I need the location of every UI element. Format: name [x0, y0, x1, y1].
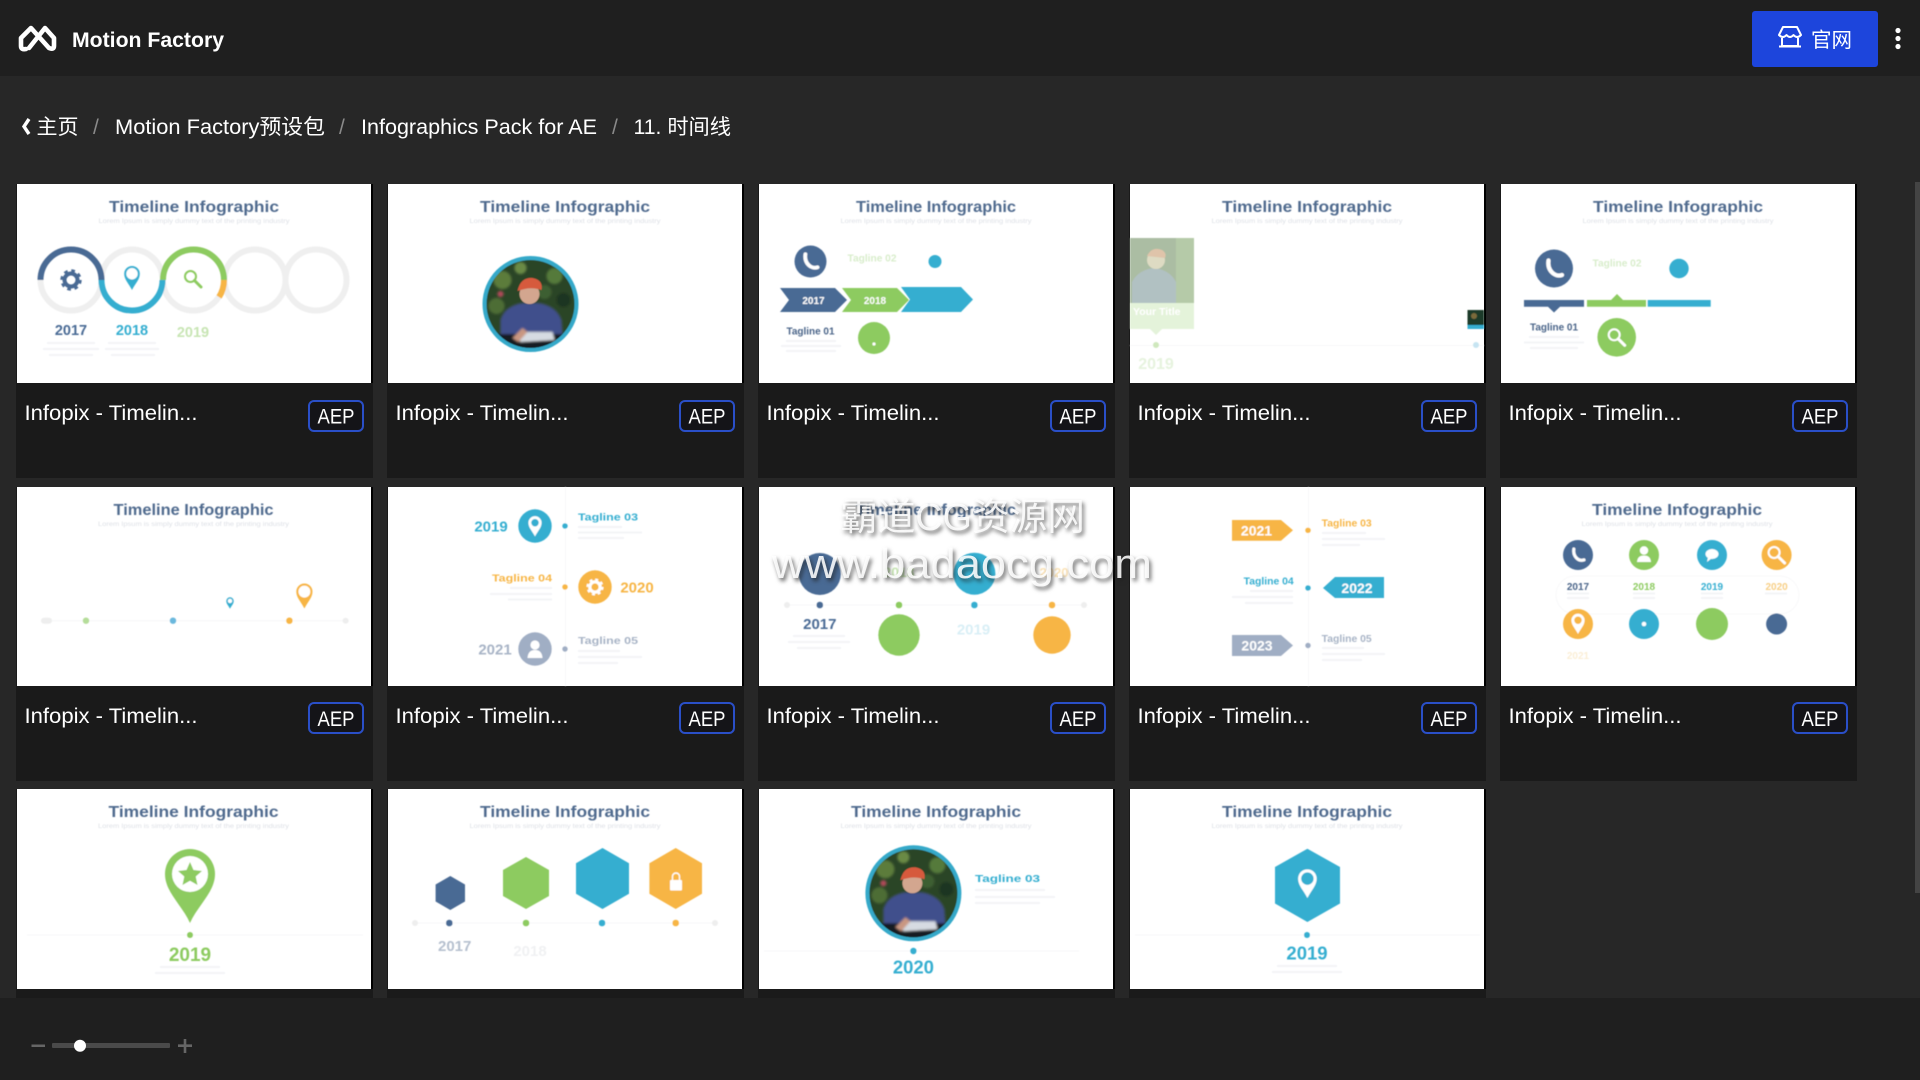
- thumbnail: pin line timeline: [41, 502, 349, 624]
- thumbnail: alternating circles timeline: 2020: [1040, 565, 1068, 580]
- thumbnail: alternating circles timeline: Timeline Infographic: [856, 502, 1016, 519]
- title: Infopix - Timelin...: [1508, 402, 1682, 425]
- thumbnail: chevron timeline: 2018: [864, 296, 887, 307]
- icon: store: [1779, 27, 1801, 46]
- thumbnail: big green pin: Timeline Infographic: [108, 804, 279, 821]
- card 14: [1129, 789, 1486, 998]
- footer bar: [0, 998, 1920, 1080]
- thumbnail: chevron timeline: [780, 199, 1032, 354]
- breadcrumb: Motion Factory预设包: [115, 116, 325, 139]
- thumbnail: vertical timeline circles: 2019: [474, 518, 508, 536]
- back chevron: [24, 119, 29, 134]
- thumbnail: icon grid timeline: Timeline Infographic: [1592, 502, 1762, 519]
- zoom in: [178, 1039, 192, 1053]
- card 2: [387, 184, 744, 478]
- badge: AEP: [1430, 406, 1468, 428]
- watermark: 霸道CG资源网: [840, 497, 1085, 539]
- thumbnail: bar timeline: Lorem Ipsum is simply dummy text of the printing industry: [1582, 218, 1774, 225]
- thumbnail: hexagon pin: Lorem Ipsum is simply dummy text of the printing industry: [1212, 823, 1403, 830]
- breadcrumb: /: [93, 116, 99, 139]
- thumbnail: icon grid timeline: 2019: [1701, 582, 1724, 593]
- thumbnail: portrait with tagline: [764, 804, 1079, 978]
- badge: [1051, 401, 1105, 431]
- card 6: [16, 487, 373, 781]
- thumbnail: hexagon timeline: [412, 804, 718, 960]
- thumbnail: hexagon timeline: Lorem Ipsum is simply dummy text of the printing industry: [470, 823, 661, 830]
- button label: 官网: [1811, 29, 1852, 52]
- badge: AEP: [688, 406, 726, 428]
- thumbnail: ring timeline: 2017: [55, 323, 87, 339]
- thumbnail: alternating circles timeline: 2018: [883, 564, 915, 580]
- breadcrumb: /: [612, 116, 618, 139]
- official site button: [1752, 11, 1878, 67]
- thumbnail: hexagon pin: 2019: [1286, 942, 1328, 964]
- title: Infopix - Timelin...: [1138, 705, 1310, 728]
- card 8: [758, 487, 1115, 781]
- thumbnail: icon grid timeline: 2018: [1633, 582, 1656, 593]
- thumbnail: arrow tag timeline: Tagline 03: [1322, 518, 1372, 530]
- thumbnail: chevron timeline: Tagline 01: [786, 326, 835, 338]
- thumbnail: alternating circles timeline: 2017: [803, 616, 836, 633]
- scrollbar: [1915, 182, 1920, 893]
- badge: [309, 703, 363, 733]
- watermark: [771, 497, 1152, 587]
- thumbnail: arrow tag timeline: 2023: [1241, 638, 1273, 654]
- card 5: [1500, 184, 1857, 478]
- thumbnail: arrow tag timeline: 2022: [1341, 580, 1373, 596]
- badge: AEP: [1802, 708, 1838, 731]
- thumbnail: portrait with tagline: Tagline 03: [975, 874, 1041, 885]
- card 9: [1129, 487, 1486, 781]
- thumbnail: photo card slide-in: Timeline Infographic: [1222, 199, 1392, 216]
- thumbnail: alternating circles timeline: [784, 502, 1087, 656]
- badge: AEP: [1060, 708, 1096, 731]
- title: Infopix - Timelin...: [1508, 705, 1682, 728]
- thumbnail: bar timeline: Timeline Infographic: [1593, 199, 1763, 216]
- thumbnail: hexagon pin: [1135, 804, 1480, 972]
- breadcrumb: Infographics Pack for AE: [361, 116, 597, 139]
- thumbnail: big green pin: Lorem Ipsum is simply dummy text of the printing industry: [98, 823, 290, 830]
- thumbnail: portrait circle: Lorem Ipsum is simply dummy text of the printing industry: [470, 218, 661, 225]
- badge: AEP: [1802, 406, 1838, 428]
- thumbnail: bar timeline: Tagline 01: [1530, 322, 1578, 334]
- thumbnail: alternating circles timeline: 2019: [957, 622, 990, 638]
- card 11: [16, 789, 373, 998]
- header bar: [0, 0, 1920, 76]
- thumbnail: photo card slide-in: Your Title: [1133, 306, 1181, 318]
- thumbnail: pin line timeline: Timeline Infographic: [114, 502, 274, 519]
- thumbnail: portrait circle: Timeline Infographic: [480, 199, 650, 216]
- thumbnail: portrait circle: [470, 199, 661, 352]
- thumbnail: photo card slide-in: [1130, 199, 1484, 373]
- thumbnail: vertical timeline circles: Tagline 05: [578, 636, 639, 647]
- title: Infopix - Timelin...: [24, 705, 198, 728]
- thumbnail: icon grid timeline: 2021: [1567, 651, 1590, 662]
- thumbnail: icon grid timeline: [1556, 502, 1799, 662]
- zoom out: [32, 1044, 45, 1047]
- card 13: [758, 789, 1115, 998]
- thumbnail: hexagon pin: Timeline Infographic: [1222, 804, 1392, 821]
- thumbnail: ring timeline: 2019: [177, 325, 209, 341]
- thumbnail: ring timeline: [40, 199, 346, 355]
- thumbnail: arrow tag timeline: [1232, 487, 1385, 686]
- card 12: [387, 789, 744, 998]
- thumbnail: vertical timeline circles: 2020: [620, 580, 654, 596]
- title: Infopix - Timelin...: [396, 705, 568, 728]
- thumbnail: arrow tag timeline: Tagline 04: [1244, 576, 1294, 588]
- thumbnail: bar timeline: Tagline 02: [1592, 258, 1642, 270]
- card 4: [1129, 184, 1486, 478]
- badge: AEP: [318, 708, 354, 731]
- badge: AEP: [688, 708, 726, 731]
- thumbnail: portrait with tagline: Lorem Ipsum is simply dummy text of the printing industry: [840, 823, 1032, 830]
- thumbnail: icon grid timeline: 2017: [1567, 582, 1590, 593]
- title: Infopix - Timelin...: [766, 402, 940, 425]
- badge: AEP: [1060, 406, 1096, 428]
- breadcrumb: 主页: [36, 116, 78, 139]
- thumbnail: arrow tag timeline: 2021: [1241, 522, 1272, 538]
- thumbnail: bar timeline: [1524, 199, 1774, 357]
- thumbnail: vertical timeline circles: Tagline 03: [578, 512, 639, 524]
- logo icon: [21, 28, 54, 49]
- thumbnail: vertical timeline circles: 2021: [478, 642, 512, 658]
- thumbnail: portrait with tagline: Timeline Infographic: [851, 804, 1021, 821]
- thumbnail: big green pin: [27, 804, 363, 973]
- thumbnail: photo card slide-in: Lorem Ipsum is simply dummy text of the printing industry: [1212, 218, 1403, 225]
- thumbnail: arrow tag timeline: Tagline 05: [1322, 634, 1372, 645]
- thumbnail: vertical timeline circles: Tagline 04: [492, 574, 553, 584]
- breadcrumb: /: [339, 116, 345, 139]
- thumbnail: icon grid timeline: Lorem Ipsum is simply dummy text of the printing industry: [1582, 521, 1773, 528]
- badge: AEP: [1430, 708, 1468, 731]
- title: Infopix - Timelin...: [1138, 402, 1310, 425]
- zoom slider: [52, 1040, 170, 1052]
- badge: [1422, 401, 1476, 431]
- menu dots: [1895, 28, 1901, 49]
- thumbnail: photo card slide-in: 2019: [1138, 356, 1174, 373]
- badge: [1051, 703, 1105, 733]
- thumbnail: ring timeline: Lorem Ipsum is simply dummy text of the printing industry: [98, 218, 290, 225]
- title: Infopix - Timelin...: [766, 705, 940, 728]
- thumbnail: hexagon timeline: 2017: [438, 938, 471, 955]
- thumbnail: chevron timeline: 2017: [802, 296, 825, 307]
- card 1: [16, 184, 373, 478]
- title: Infopix - Timelin...: [24, 402, 198, 425]
- thumbnail: ring timeline: 2018: [116, 323, 148, 339]
- card 3: [758, 184, 1115, 478]
- thumbnail: icon grid timeline: 2020: [1765, 582, 1788, 593]
- thumbnail: chevron timeline: Timeline Infographic: [856, 199, 1016, 216]
- breadcrumb: [24, 116, 731, 139]
- badge: [309, 401, 363, 431]
- badge: [1422, 703, 1476, 733]
- badge: AEP: [318, 406, 354, 428]
- thumbnail: vertical timeline circles: [474, 487, 654, 686]
- thumbnail: hexagon timeline: 2018: [513, 943, 547, 960]
- brand name: Motion Factory: [72, 29, 224, 52]
- card 7: [387, 487, 744, 781]
- badge: [680, 703, 734, 733]
- thumbnail: chevron timeline: Tagline 02: [848, 254, 897, 264]
- badge: [1793, 401, 1847, 431]
- thumbnail: portrait with tagline: 2020: [893, 956, 934, 978]
- thumbnail: big green pin: 2019: [169, 945, 211, 966]
- thumbnail: pin line timeline: Lorem Ipsum is simply dummy text of the printing industry: [98, 521, 290, 528]
- card 10: [1500, 487, 1857, 781]
- thumbnail: chevron timeline: Lorem Ipsum is simply dummy text of the printing industry: [840, 218, 1032, 225]
- thumbnail: ring timeline: Timeline Infographic: [109, 199, 279, 216]
- watermark: www.badaocg.com: [771, 540, 1152, 587]
- title: Infopix - Timelin...: [396, 402, 568, 425]
- breadcrumb: 11. 时间线: [634, 116, 731, 139]
- thumbnail: hexagon timeline: Timeline Infographic: [480, 804, 650, 821]
- badge: [1793, 703, 1847, 733]
- badge: [680, 401, 734, 431]
